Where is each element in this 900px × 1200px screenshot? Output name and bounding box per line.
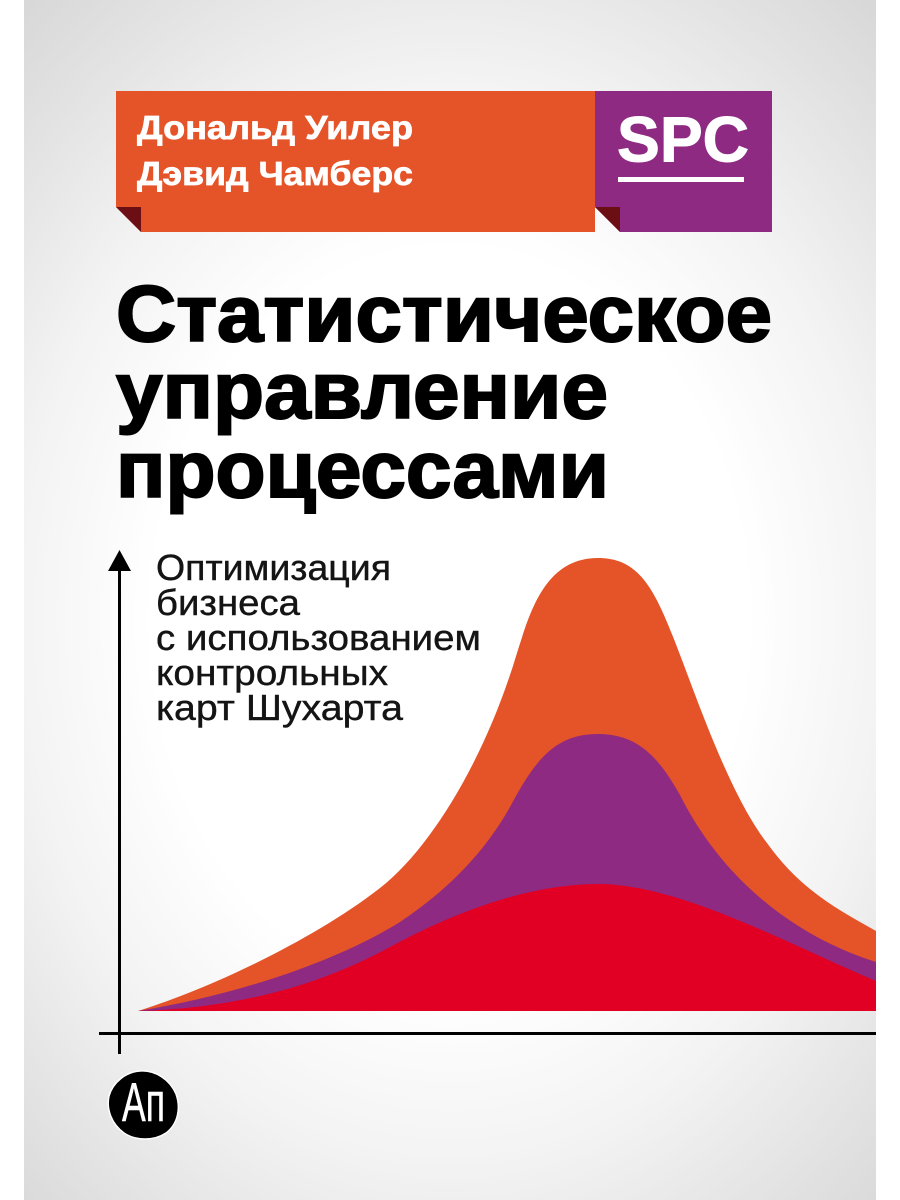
subtitle: контрольных	[156, 652, 388, 693]
y axis	[118, 568, 121, 1054]
orange ribbon	[116, 91, 595, 232]
SPC badge	[595, 91, 772, 232]
title: управление	[116, 346, 608, 435]
purple curve	[138, 734, 876, 1011]
purple ribbon fold	[595, 207, 620, 232]
title	[116, 269, 772, 514]
bell curves chart	[138, 558, 876, 1011]
subtitle: бизнеса	[156, 582, 301, 623]
orange curve	[138, 558, 876, 1011]
x axis	[99, 1032, 876, 1035]
author names: Дэвид Чамберс	[137, 155, 413, 192]
subtitle	[156, 547, 481, 728]
logo letters: Ап	[122, 1071, 165, 1133]
red curve	[138, 884, 876, 1011]
title: процессами	[116, 425, 609, 514]
author names: Дональд Уилер	[137, 109, 413, 146]
axes	[99, 550, 876, 1054]
subtitle: Оптимизация	[156, 547, 391, 588]
publisher logo	[108, 1071, 178, 1139]
author banner	[116, 91, 595, 232]
orange ribbon fold	[116, 207, 141, 232]
author names	[137, 109, 413, 192]
SPC underline	[618, 177, 744, 182]
y axis arrow	[108, 550, 131, 571]
subtitle: карт Шухарта	[156, 687, 404, 728]
subtitle: с использованием	[156, 617, 481, 658]
purple ribbon	[595, 91, 772, 232]
SPC label: SPC	[617, 104, 749, 176]
title: Статистическое	[116, 269, 772, 358]
logo circle	[108, 1071, 178, 1139]
